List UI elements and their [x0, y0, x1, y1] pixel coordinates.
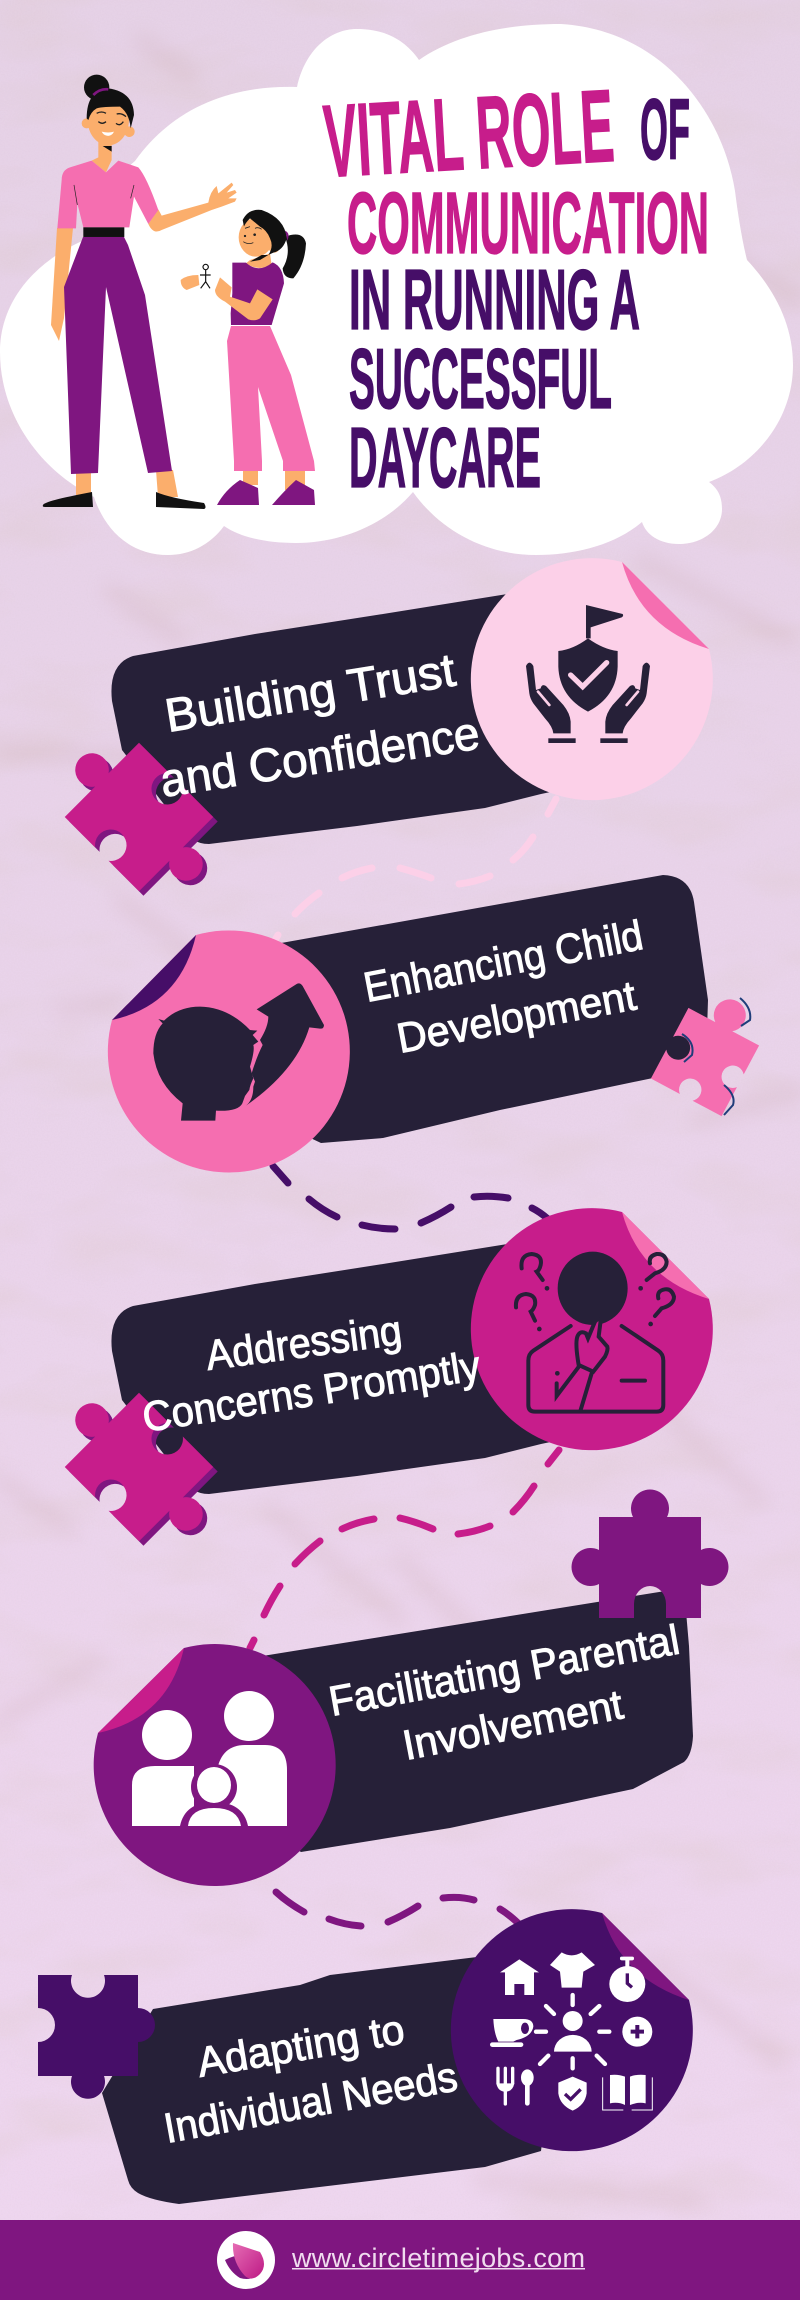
step 3 puzzle piece — [43, 1371, 239, 1567]
footer logo — [217, 2231, 275, 2289]
icon: child needs set — [490, 1952, 652, 2111]
icon: shield in hands with flag — [526, 605, 650, 743]
step 3 text: Addressing — [203, 1306, 404, 1379]
step 1 icon circle — [471, 558, 713, 800]
step 2 text — [360, 911, 647, 1062]
step 5 text — [160, 2005, 461, 2152]
step 2 text: Development — [393, 971, 640, 1062]
step 3 icon circle — [471, 1208, 713, 1450]
step 3 text: Concerns Promptly — [139, 1342, 483, 1441]
step 5 text: Individual Needs — [160, 2053, 461, 2152]
step 3 banner — [111, 1242, 560, 1494]
illustration: girl — [181, 210, 315, 505]
step 1 text: Building Trust — [161, 643, 459, 742]
step 5 icon circle — [451, 1909, 693, 2151]
step 1 puzzle piece — [43, 721, 239, 917]
step 5 puzzle piece — [38, 1975, 155, 2099]
step 2 banner — [230, 875, 708, 1143]
step 4 banner — [220, 1588, 693, 1852]
icon: child head with rising arrow — [153, 983, 324, 1121]
step 4 text: Facilitating Parental — [325, 1616, 683, 1725]
title: DAYCARE — [349, 411, 541, 506]
step 4 text — [325, 1616, 683, 1769]
dashed connector: step 1 to 2 — [272, 799, 556, 945]
step 1 text — [156, 643, 483, 807]
title: OF — [640, 82, 690, 178]
step 5 text: Adapting to — [194, 2005, 408, 2086]
step 4 icon circle — [94, 1644, 336, 1886]
icon: family — [132, 1691, 287, 1826]
step 4 text: Involvement — [399, 1680, 627, 1769]
dashed connector: step 3 to 4 — [250, 1450, 559, 1648]
header cloud — [0, 24, 793, 555]
step 4 puzzle piece — [572, 1490, 728, 1618]
step 4: facilitating parental involvement — [94, 1490, 728, 1886]
step 2 icon circle — [108, 930, 350, 1172]
icon: person thinking with question marks — [516, 1252, 674, 1412]
footer bar — [0, 2220, 800, 2300]
step 1 banner — [111, 592, 560, 844]
illustration: woman — [43, 75, 237, 509]
dashed connector: step 2 to 3 — [273, 1166, 548, 1229]
step 5: adapting to individual needs — [38, 1909, 693, 2204]
step 5 banner — [102, 1957, 560, 2204]
step 1 text: and Confidence — [156, 706, 483, 807]
title — [321, 68, 709, 506]
step 2 text: Enhancing Child — [360, 911, 647, 1011]
website url: www.circletimejobs.com — [291, 2243, 585, 2273]
step 3: addressing concerns promptly — [43, 1208, 713, 1567]
dashed connector: step 4 to 5 — [276, 1892, 520, 1926]
step 1: building trust and confidence — [43, 558, 713, 917]
step 2: enhancing child development — [108, 875, 773, 1172]
step 2 puzzle piece — [651, 982, 773, 1116]
